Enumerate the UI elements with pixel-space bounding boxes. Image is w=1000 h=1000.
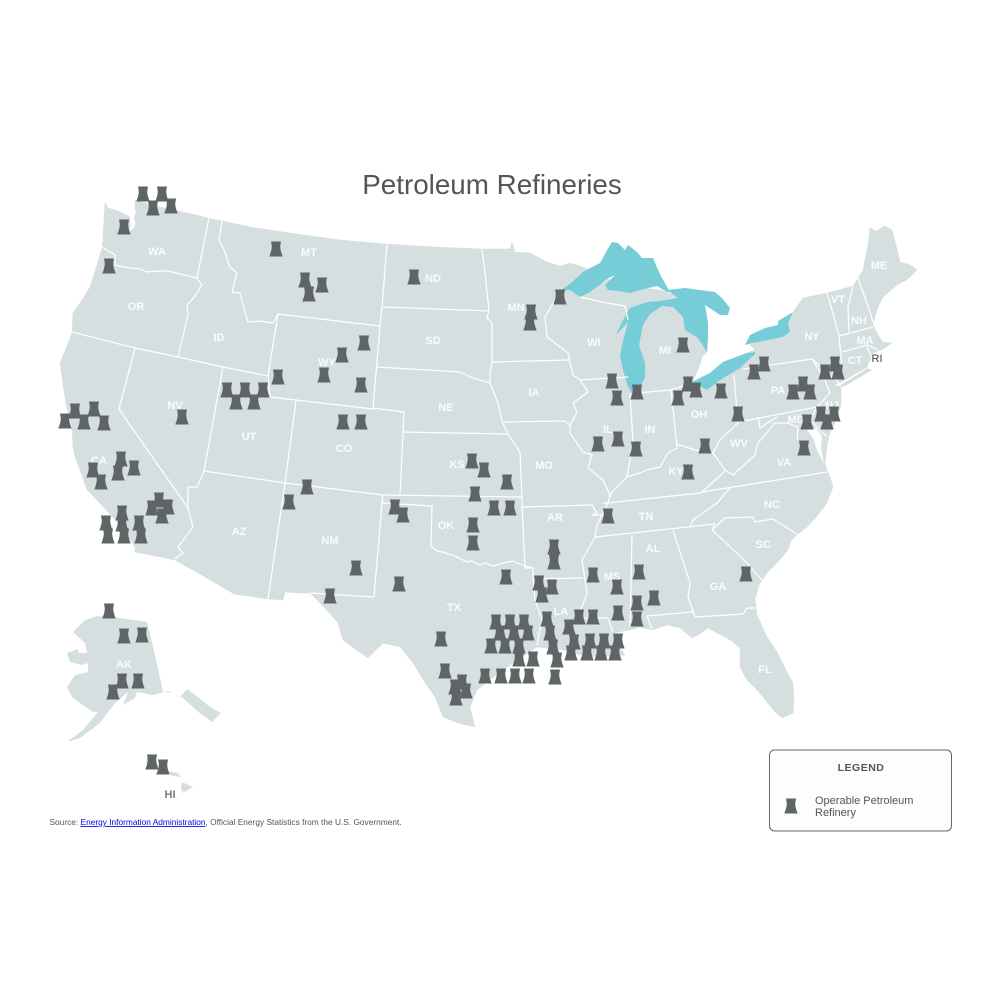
map: Alaska [67,616,221,742]
state labels: IA [528,387,540,399]
state labels: WA [148,246,166,258]
state labels [91,246,887,676]
state labels: UT [242,431,257,443]
Chesapeake Bay [807,428,824,464]
state labels: MS [604,571,620,583]
state labels: ME [871,260,887,272]
state labels: NY [804,331,820,343]
map: contiguous United States [60,200,917,727]
state labels: ND [425,273,441,285]
legend text: Operable Petroleum [815,795,913,807]
label: Rhode Island: RI [872,353,882,365]
state labels: NM [321,535,339,547]
state labels: NV [167,400,183,412]
state labels: CO [336,443,353,455]
legend text: Refinery [815,807,856,819]
state labels: IL [603,424,613,436]
state labels: WI [587,337,601,349]
state labels: WV [730,438,749,450]
title: Petroleum Refineries [362,169,622,200]
state labels: AR [547,512,563,524]
state labels: MD [787,414,805,426]
state labels: OH [691,409,707,421]
lakes: Michigan and Huron [616,288,730,394]
state labels: FL [758,664,772,676]
state labels: SC [755,539,771,551]
map: Alaska: AK [116,659,132,671]
state labels: GA [710,581,726,593]
state labels: KY [668,466,684,478]
state labels: NH [851,315,867,327]
state labels: NC [764,499,780,511]
refinery markers [58,186,845,774]
state labels: AZ [232,526,247,538]
state labels: LA [554,606,568,618]
state labels: NJ [825,400,839,412]
state labels: SD [425,335,441,347]
legend [770,750,952,831]
state borders [72,218,878,645]
state labels: PA [771,385,785,397]
state labels: MT [301,247,317,259]
state labels: ID [214,332,225,344]
state labels: CT [848,355,863,367]
state labels: AL [646,543,661,555]
Long Island [836,368,872,388]
state labels: OR [128,301,144,313]
state labels: CA [91,455,107,467]
lake: Ontario [745,312,793,345]
state labels: VA [777,457,791,469]
source note: Source: Energy Information Administration, Official Energy Statistics from the U.S. Government. [50,817,402,827]
state labels: TX [447,602,462,614]
lake: Superior [560,242,670,297]
map: Hawaii: HI [164,789,176,801]
state labels: IN [644,424,656,436]
state labels: NE [438,402,454,414]
land silhouette [60,200,917,727]
lake: Erie [693,352,755,390]
state labels: WY [318,357,337,369]
state labels: TN [639,511,653,523]
state labels: KS [449,459,465,471]
state labels: MO [535,460,553,472]
state labels: MI [659,345,671,357]
state labels: MN [507,302,525,314]
map: Hawaii [146,758,193,801]
legend icon: refinery [784,798,798,814]
state labels: VT [831,294,845,306]
state labels: OK [438,520,454,532]
legend heading: LEGEND [838,762,884,774]
state labels: MA [856,335,874,347]
